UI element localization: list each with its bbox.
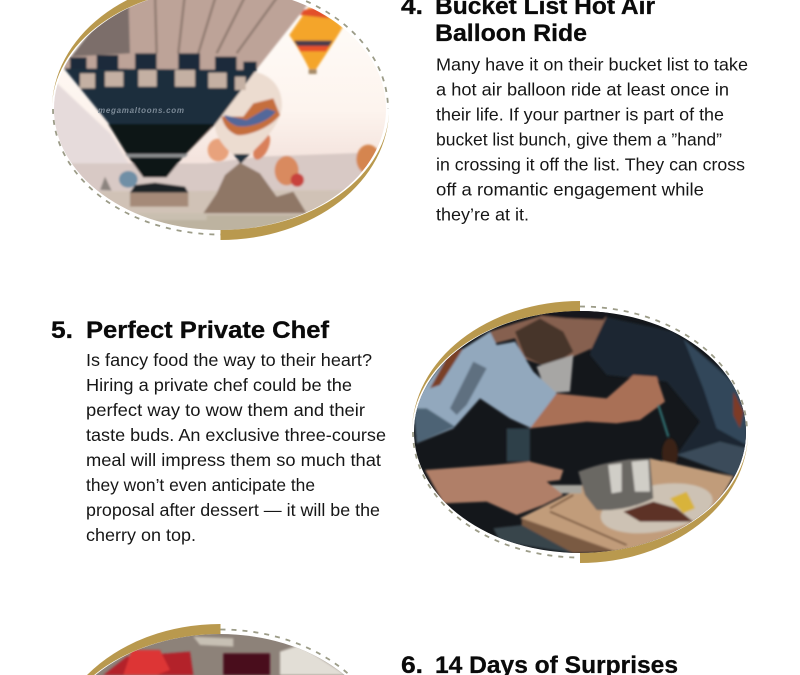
shirt xyxy=(413,332,557,443)
frame: balloon photo ring xyxy=(52,0,389,240)
heading: item 4 xyxy=(401,0,655,47)
small balloons xyxy=(208,139,229,161)
text: item 4 description: a hot air balloon ride at least once in xyxy=(436,80,729,100)
text: item 4 description: off a romantic engagement while xyxy=(436,180,704,200)
text: item 5 description: meal will impress them so much that xyxy=(86,450,381,470)
board xyxy=(520,458,733,552)
heading: item 5: 5. xyxy=(51,317,73,344)
photo: chef plating xyxy=(410,305,750,560)
face xyxy=(490,315,607,367)
text: item 4 description: in crossing it off the list. They can cross xyxy=(436,154,745,174)
balloon logo text: megamaltoons.com xyxy=(98,106,184,115)
text: item 4 description xyxy=(436,54,748,224)
text: item 5 description: perfect way to wow them and their xyxy=(86,400,365,420)
text: item 5 description: Is fancy food the way to their heart? xyxy=(86,350,372,370)
pan xyxy=(578,458,653,510)
text: item 4 description: Many have it on their bucket list to take xyxy=(436,54,748,74)
plate xyxy=(600,482,714,534)
undershirt xyxy=(537,355,573,393)
text: item 5 description: proposal after dessert — it will be the xyxy=(86,500,380,520)
heading: item 4: Balloon Ride xyxy=(435,20,587,47)
basket xyxy=(130,193,188,207)
hand xyxy=(425,462,563,515)
lower dark xyxy=(493,525,573,553)
rock xyxy=(203,163,307,213)
second balloon xyxy=(215,72,282,155)
spoon and sauce xyxy=(658,405,668,437)
big balloon envelope xyxy=(63,0,317,177)
frame: chef photo ring xyxy=(412,301,748,563)
text: item 5 description xyxy=(86,350,386,545)
heading: item 5: Perfect Private Chef xyxy=(86,317,330,344)
photo: surprise gifts xyxy=(96,634,344,675)
orange balloon xyxy=(289,7,343,69)
frame: gifts photo ring xyxy=(87,624,350,675)
text: item 4 description: they’re at it. xyxy=(436,204,529,224)
text: item 4 description: their life. If your partner is part of the xyxy=(436,104,724,124)
checker dark row xyxy=(70,53,257,72)
text: item 5 description: taste buds. An exclusive three-course xyxy=(86,425,386,445)
arm xyxy=(530,375,665,428)
text: item 5 description: Hiring a private chef could be the xyxy=(86,375,352,395)
text: item 4 description: bucket list bunch, give them a ”hand” xyxy=(436,130,722,150)
text: item 5 description: cherry on top. xyxy=(86,525,196,545)
text: item 5 description: they won’t even anticipate the xyxy=(86,475,315,495)
photo: hot air balloons xyxy=(50,0,393,243)
